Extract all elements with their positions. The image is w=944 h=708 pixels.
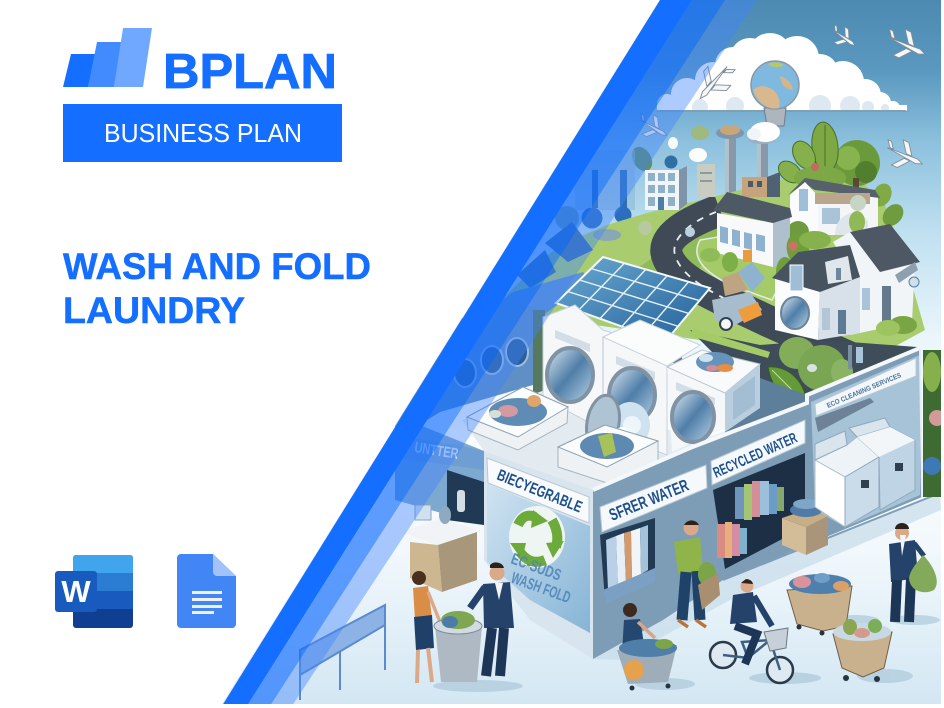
house: right rear <box>833 224 920 335</box>
store wordmark text: WASH FOLD <box>509 570 573 607</box>
icon: Word document: W <box>61 574 91 609</box>
sign: biodegradable <box>487 458 589 523</box>
sky and ground background <box>222 0 941 704</box>
sign: upper store <box>815 358 916 416</box>
laundry bin right <box>558 425 658 483</box>
road <box>666 210 860 362</box>
sign: recycled water <box>711 420 805 485</box>
title <box>63 246 371 331</box>
sign: upper store: ECO CLEANING SERVICES <box>826 372 903 410</box>
store wordmark text <box>510 552 570 602</box>
right edge foliage <box>923 350 944 497</box>
metal laundry bin <box>434 611 482 682</box>
store front: left wall with recycling panel <box>484 451 593 659</box>
laundry cart upper <box>787 573 852 636</box>
panel support <box>673 357 682 364</box>
sign: spring water: SFRER WATER <box>606 476 691 525</box>
title: WASH AND FOLD <box>63 246 371 287</box>
illustration: eco laundry scene <box>222 0 944 706</box>
store base and ground line <box>593 493 941 660</box>
woman with bin <box>412 571 440 683</box>
diagonal band: translucent light <box>270 0 757 706</box>
floating items and towers <box>628 122 780 193</box>
laundry bin left <box>467 387 568 450</box>
title: LAUNDRY <box>63 290 245 331</box>
house: front with round washer window <box>772 245 917 340</box>
icon: recycling symbol <box>509 506 565 568</box>
woman with cart <box>617 603 677 690</box>
man in suit <box>470 562 514 676</box>
ground shadows <box>433 615 940 692</box>
left dim counter section: UNTTER <box>413 439 460 463</box>
green hill <box>504 180 925 346</box>
dim solar panels and bushes behind band <box>517 206 652 288</box>
dim folding table <box>300 605 385 700</box>
man in green shirt <box>674 520 720 627</box>
bushes by lawn <box>700 231 831 274</box>
sign: biodegradable: BIECYEGRABLE <box>495 467 585 517</box>
icon: globe light bulb <box>751 61 799 126</box>
shop opening with shirts <box>713 453 805 569</box>
business plan banner <box>63 104 342 162</box>
diagonal band: translucent medium <box>247 0 725 706</box>
diagonal band: solid <box>222 0 692 706</box>
courtyard road behind store <box>690 330 917 398</box>
courtyard bushes and leaf <box>768 337 863 394</box>
planes <box>640 24 926 168</box>
cyclist <box>710 579 793 683</box>
logo mark: three bars <box>63 28 152 87</box>
dim laundromat machines behind store <box>395 298 545 426</box>
cloud <box>657 33 907 117</box>
laundry cart lower <box>833 619 892 682</box>
man with green bag <box>889 523 937 622</box>
icon: Google Docs <box>177 554 236 628</box>
side washers <box>815 398 915 527</box>
shop opening with clothes rack <box>600 518 655 604</box>
business plan banner: BUSINESS PLAN <box>104 118 302 148</box>
delivery van with parcels <box>712 262 765 330</box>
store front: right wall <box>593 348 922 659</box>
store roof deck <box>462 391 725 490</box>
sign: recycled water: RECYCLED WATER <box>711 429 800 482</box>
dim back wall <box>506 272 584 314</box>
house: back <box>788 178 880 237</box>
solar panel <box>556 257 710 342</box>
house: middle <box>685 192 792 267</box>
brand name: BPLAN <box>163 45 337 99</box>
icon: Word document <box>55 555 133 628</box>
tan box with folded clothes <box>782 499 828 555</box>
washing machines <box>543 305 760 455</box>
distant office buildings <box>645 164 780 210</box>
lawn inside road curve <box>696 236 775 301</box>
open washer door with foam <box>585 394 650 437</box>
foliage and tree behind houses <box>774 121 908 230</box>
sign: spring water <box>600 465 707 532</box>
distant towers and domes <box>582 150 635 228</box>
wall behind washer three <box>725 378 805 432</box>
cloud base line <box>657 110 910 112</box>
left dim counter section <box>395 415 484 592</box>
store wordmark text: EC-SUDS <box>509 551 564 585</box>
